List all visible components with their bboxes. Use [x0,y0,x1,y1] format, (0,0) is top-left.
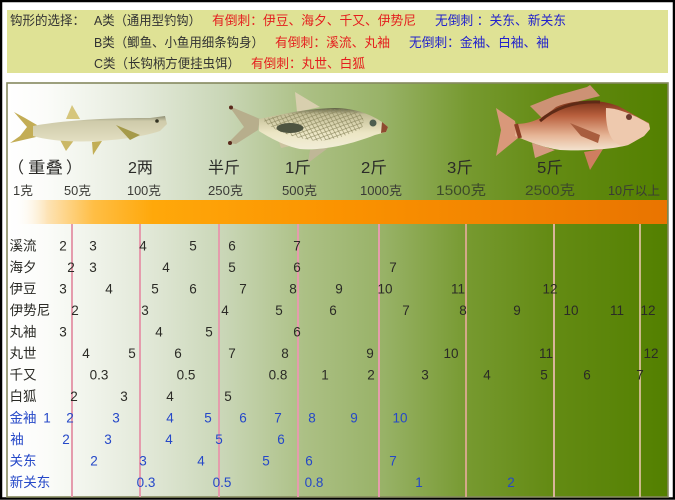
row: 关东: 2 [90,454,98,468]
row: 伊豆: 12 [542,282,558,296]
row: 海夕: 海夕 [10,260,36,275]
weight labels: grams [13,182,660,198]
row: 金袖: 7 [274,410,282,426]
row: 千又: 4 [483,368,491,382]
row: 丸世: 8 [281,346,289,361]
icon: carp [228,92,388,163]
weight labels: grams: 2500克 [525,182,575,198]
row: 新关东 [10,475,515,490]
row: 新关东: 0.5 [213,475,231,490]
weight labels: jin: ） [66,159,82,177]
weight labels: grams: 10斤以上 [608,184,660,198]
weight labels: jin: 2两 [128,160,153,177]
row: 溪流: 7 [293,238,301,254]
row: 新关东: 0.8 [305,475,323,490]
row: type B: B类（鲫鱼、小鱼用细条钩身） [94,35,264,50]
row: 伊豆: 4 [105,282,113,296]
row: 伊豆: 11 [451,282,465,296]
row: type C: 有倒刺：丸世、白狐 [251,56,365,71]
row: 伊势尼: 6 [329,303,337,318]
vertical grid lines [72,224,640,497]
row: 溪流: 6 [228,238,236,254]
row: 金袖: 5 [204,410,212,426]
row: 伊势尼: 伊势尼 [10,303,50,318]
row: 伊豆: 5 [151,282,159,296]
icon: red snapper [496,85,650,170]
weight labels: grams: 50克 [64,184,91,198]
row: 金袖: 金袖 [10,410,36,426]
row: 关东: 5 [262,454,270,468]
row: 白狐: 白狐 [10,389,37,404]
row: 金袖: 8 [308,410,316,426]
weight labels: grams: 250克 [208,184,243,198]
row: 关东: 关东 [10,454,36,468]
row: 金袖: 6 [239,410,247,426]
row: 伊豆 [10,282,558,296]
row: 溪流: 溪流 [10,238,37,254]
weight labels: jin [8,159,563,177]
row: 伊豆: 9 [335,282,343,296]
row: 伊豆: 伊豆 [10,282,36,296]
row: type A: 无倒刺 ：关东、新关东 [435,13,566,28]
row: 新关东: 新关东 [10,475,50,490]
row: 伊势尼: 7 [402,303,410,318]
row: 袖: 4 [165,432,173,447]
row: 丸世: 12 [643,346,659,361]
row: 关东: 3 [139,454,147,468]
row: 金袖: 10 [392,410,408,426]
row: 千又: 0.3 [90,368,108,382]
row: 白狐 [10,389,232,404]
row: 新关东: 1 [415,475,423,490]
row: 金袖: 4 [166,410,174,426]
row: 伊豆: 7 [239,282,247,296]
row: 袖: 2 [62,432,70,447]
row: 袖: 5 [215,432,223,447]
row: 新关东: 2 [507,475,515,490]
row: 伊势尼: 8 [459,303,467,318]
row: 千又: 2 [367,368,375,382]
row: 丸世: 4 [82,346,90,361]
row: 海夕: 7 [389,260,397,275]
row: 白狐: 5 [224,389,232,404]
row: 伊势尼: 11 [610,303,624,318]
row: 袖: 袖 [10,432,24,447]
row: 千又: 千又 [10,368,37,382]
row: 千又: 0.5 [177,368,195,382]
row: type C [94,56,365,71]
row: 丸世: 6 [174,346,182,361]
row: 千又: 5 [540,368,548,382]
row: 溪流: 3 [89,238,97,254]
row: type A: A类（通用型钓钩） [94,13,201,28]
weight labels: grams: 100克 [127,184,161,198]
row: 丸袖: 4 [155,324,163,340]
row: type C: C类（长钩柄方便挂虫饵） [94,56,240,71]
row: 金袖: 9 [350,410,358,426]
row: 金袖: 3 [112,410,120,426]
weight labels: jin: 2斤 [361,159,387,177]
row: 丸世: 10 [443,346,459,361]
row: type B: 有倒刺：溪流、丸袖 [275,35,390,50]
row: 千又: 1 [321,368,329,382]
row: 海夕: 5 [228,260,236,275]
row: 袖 [10,432,285,447]
row: 海夕: 4 [162,260,170,275]
row: 千又: 7 [636,368,644,382]
row: 伊势尼: 9 [513,303,521,318]
row: 海夕 [10,260,397,275]
row: 伊势尼: 5 [275,303,283,318]
row: 白狐: 3 [120,389,128,404]
weight labels: grams: 1克 [13,184,33,198]
row: 丸世: 11 [539,346,553,361]
row: 金袖: 1 [43,410,51,426]
row: 丸世: 丸世 [10,346,36,361]
row: 海夕: 6 [293,260,301,275]
row: 丸袖: 3 [59,324,67,340]
weight labels: jin: 1斤 [285,159,311,177]
row: type A [94,13,566,28]
row: type B [94,35,549,50]
row: 海夕: 3 [89,260,97,275]
row: 丸世 [10,346,659,361]
row: 丸世: 9 [366,346,374,361]
row: 溪流: 5 [189,238,197,254]
row: 丸世: 5 [128,346,136,361]
weight labels: jin: 5斤 [537,159,563,177]
icon: small silver fish [10,105,167,155]
row: 伊势尼: 3 [141,303,149,318]
row: 伊豆: 8 [289,282,297,296]
weight labels: jin: 重叠 [28,159,63,177]
row: 伊势尼: 4 [221,303,229,318]
row: 丸袖: 6 [293,324,301,340]
row: 关东: 7 [389,454,397,468]
weight labels: jin: （ [8,159,24,177]
row: 关东 [10,454,397,468]
row: 白狐: 4 [166,389,174,404]
row: 溪流 [10,238,301,254]
row: 白狐: 2 [70,389,78,404]
row: 金袖 [10,410,408,426]
row: 伊势尼: 10 [563,303,579,318]
row: 关东: 6 [305,454,313,468]
row: 金袖: 2 [66,410,74,426]
orange weight scale bar [8,200,667,224]
row: 千又: 6 [583,368,591,382]
row: 海夕: 2 [67,260,75,275]
row: 丸世: 7 [228,346,236,361]
row: 伊势尼: 2 [71,303,79,318]
row: 伊豆: 10 [377,282,393,296]
row: 袖: 6 [277,432,285,447]
row: 新关东: 0.3 [137,475,155,490]
weight labels: grams: 1500克 [436,182,486,198]
weight labels: jin: 半斤 [208,159,240,177]
weight labels: grams: 500克 [282,184,317,198]
row: 千又: 3 [421,368,429,382]
row: 袖: 3 [104,432,112,447]
row: 伊豆: 3 [59,282,67,296]
row: 千又 [10,368,644,382]
row: type A: 有倒刺：伊豆、海夕、千又、伊势尼 [212,13,416,28]
row: 关东: 4 [197,454,205,468]
heading: hook selection: 钩形的选择： [10,13,85,28]
row: 伊势尼: 12 [640,303,656,318]
row: 千又: 0.8 [269,368,287,382]
row: 溪流: 2 [59,238,67,254]
weight labels: grams: 1000克 [360,184,402,198]
row: 溪流: 4 [139,238,147,254]
row: 丸袖: 5 [205,324,213,340]
row: 丸袖: 丸袖 [10,324,36,340]
row: type B: 无倒刺：金袖、白袖、袖 [409,35,549,50]
weight labels: jin: 3斤 [447,159,473,177]
row: 伊豆: 6 [189,282,197,296]
row: 丸袖 [10,324,301,340]
row: 伊势尼 [10,303,656,318]
panel: hook type selection [7,10,668,73]
